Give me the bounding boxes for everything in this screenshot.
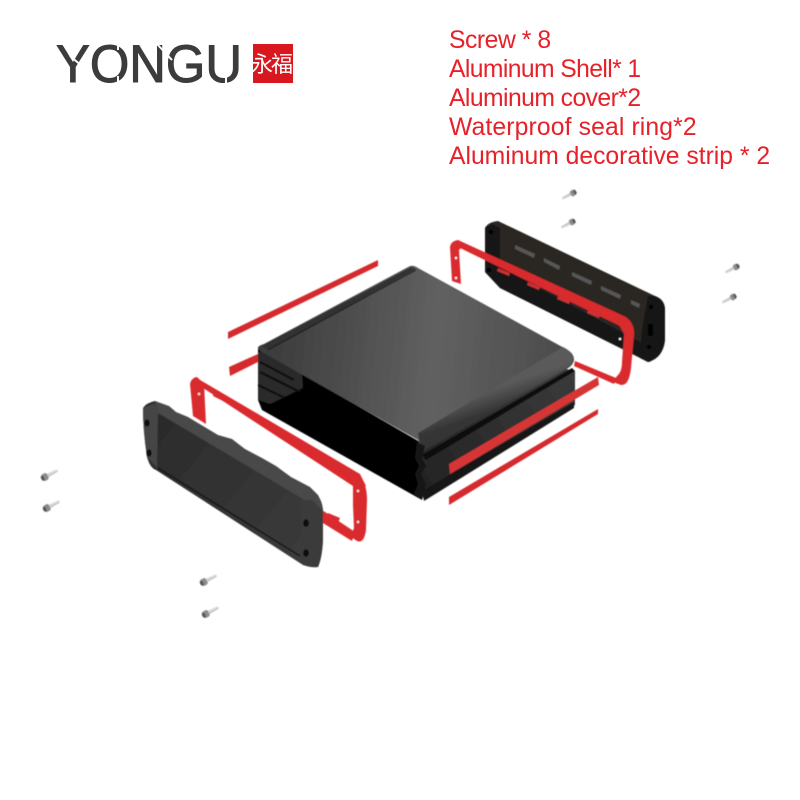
- screws, lower: [199, 572, 220, 619]
- ring right side: [613, 318, 634, 385]
- ring left side: [450, 240, 464, 284]
- logo: [56, 35, 293, 94]
- side groove: [422, 368, 575, 460]
- ring top edge: [195, 377, 366, 488]
- ring bottom edge: [574, 361, 616, 384]
- parts list: Screw * 8: [449, 27, 551, 54]
- cover right lip: [300, 500, 323, 567]
- rear end cover: [485, 221, 665, 362]
- parts list: Aluminum Shell* 1: [449, 56, 641, 83]
- parts list: Aluminum cover*2: [449, 85, 641, 112]
- front seal ring: [190, 377, 367, 542]
- side panel: [418, 369, 575, 500]
- top panel: [258, 266, 574, 448]
- ring left side: [190, 377, 206, 424]
- ring tabs: [213, 392, 340, 523]
- parts list: [449, 27, 770, 170]
- parts list: Aluminum decorative strip * 2: [449, 143, 770, 170]
- rear rail: [262, 267, 416, 350]
- logo seal: 福: [271, 47, 293, 79]
- shell end ribs: [414, 442, 426, 500]
- ring tabs: [497, 268, 600, 318]
- decorative strip on shell: [449, 377, 599, 474]
- logo seal: 永: [251, 47, 273, 79]
- aluminum shell: [258, 266, 575, 501]
- cover left lip: [143, 403, 158, 468]
- logo wordmark: YONGU: [56, 35, 242, 94]
- ring top edge: [458, 240, 630, 327]
- decorative strip, upper left: [228, 260, 378, 339]
- front lip: [418, 347, 573, 452]
- parts list: Waterproof seal ring*2: [449, 114, 697, 141]
- exploded enclosure assembly: [40, 189, 741, 619]
- shell opening: [258, 348, 422, 500]
- decorative strip, lower right: [449, 409, 598, 505]
- screws, left: [40, 467, 61, 513]
- rear seal ring: [450, 240, 634, 385]
- cover top rim: [155, 401, 322, 510]
- screws, upper rear: [560, 189, 578, 230]
- ring right side: [351, 477, 367, 542]
- inner ribs: [258, 352, 303, 404]
- screws, right: [721, 263, 741, 305]
- logo seal: [251, 44, 293, 83]
- ring bottom edge: [318, 510, 355, 541]
- front end cover: [143, 401, 323, 567]
- decorative strip, lower left: [229, 354, 258, 376]
